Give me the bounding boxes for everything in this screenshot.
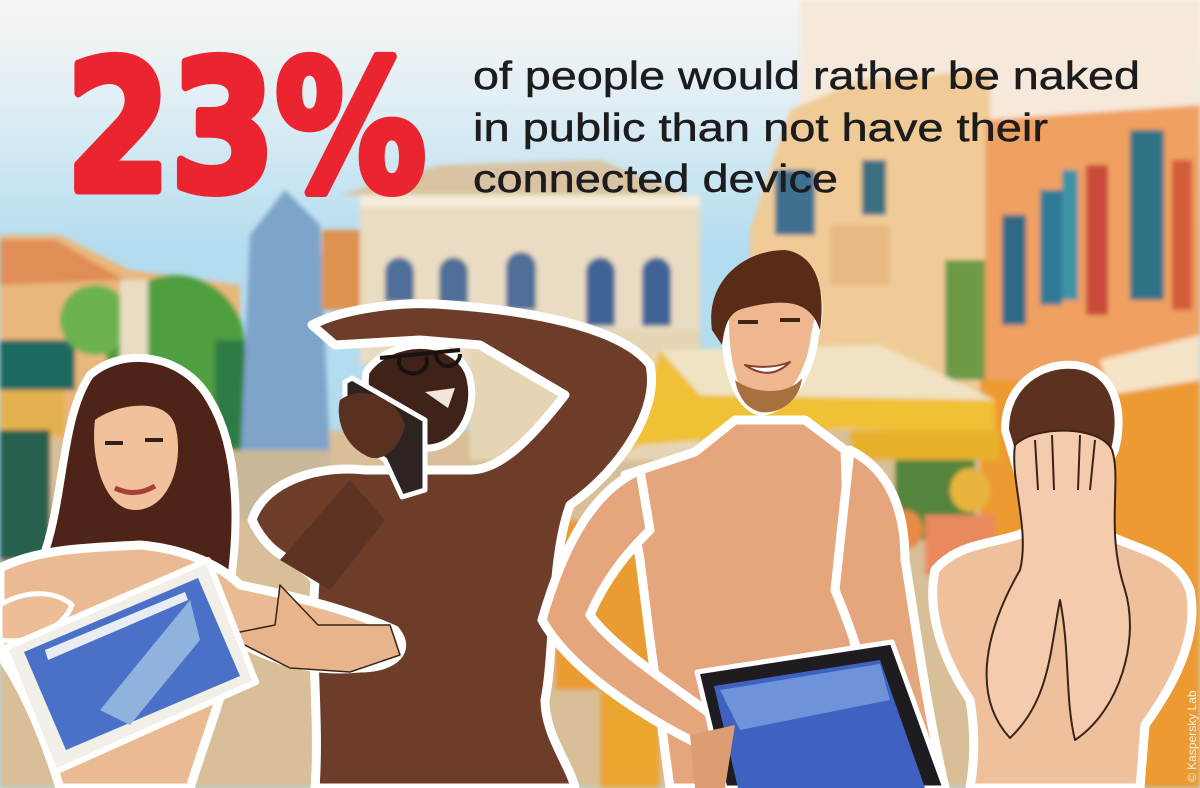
tablet — [5, 560, 256, 772]
forearms and hands — [987, 431, 1130, 740]
left arm — [542, 470, 725, 745]
head — [365, 345, 472, 448]
face — [94, 406, 178, 510]
pale right haze — [800, 0, 1200, 230]
smile — [115, 486, 155, 493]
hair — [711, 250, 822, 345]
hand at left — [0, 594, 72, 641]
body and arms — [0, 545, 402, 788]
description text — [473, 55, 1140, 201]
eyes — [105, 440, 163, 443]
yellow parasol — [630, 345, 995, 450]
description text: connected device — [473, 158, 838, 201]
mouth — [425, 388, 455, 408]
headline statistic: 23% — [66, 24, 426, 233]
eyes — [738, 320, 800, 322]
green trees — [105, 275, 245, 415]
credit: © Kaspersky Lab — [1185, 690, 1199, 782]
hair and head — [1005, 365, 1119, 480]
hair — [42, 358, 235, 600]
right buildings — [750, 70, 990, 430]
blue tower — [240, 190, 330, 470]
arm shading — [280, 480, 385, 590]
head and neck — [724, 258, 819, 412]
ground — [0, 430, 1200, 788]
phone hand — [339, 393, 405, 458]
left house with roof — [0, 235, 240, 440]
figure: man with tablet — [542, 250, 945, 788]
description text: in public than not have their — [473, 107, 1048, 150]
finger lines — [1035, 435, 1095, 490]
hand — [690, 725, 735, 788]
glasses — [380, 350, 460, 373]
background crowd and walls — [555, 520, 655, 690]
figure: woman with tablet, left — [0, 358, 402, 788]
smile — [745, 362, 790, 373]
description text: of people would rather be naked — [473, 55, 1140, 98]
tablet screen — [714, 660, 925, 788]
torso and raised arm — [252, 304, 652, 788]
tablet — [697, 642, 945, 788]
pointing hand — [225, 585, 400, 672]
beard — [735, 378, 802, 412]
orange right block — [980, 380, 1200, 788]
right arm — [835, 450, 945, 788]
central building — [360, 195, 700, 365]
torso — [625, 420, 870, 788]
tablet screen — [24, 578, 240, 750]
figure: man on the phone — [252, 304, 652, 788]
body — [933, 530, 1192, 788]
figure: woman covering her face — [933, 365, 1192, 788]
phone — [345, 378, 425, 497]
